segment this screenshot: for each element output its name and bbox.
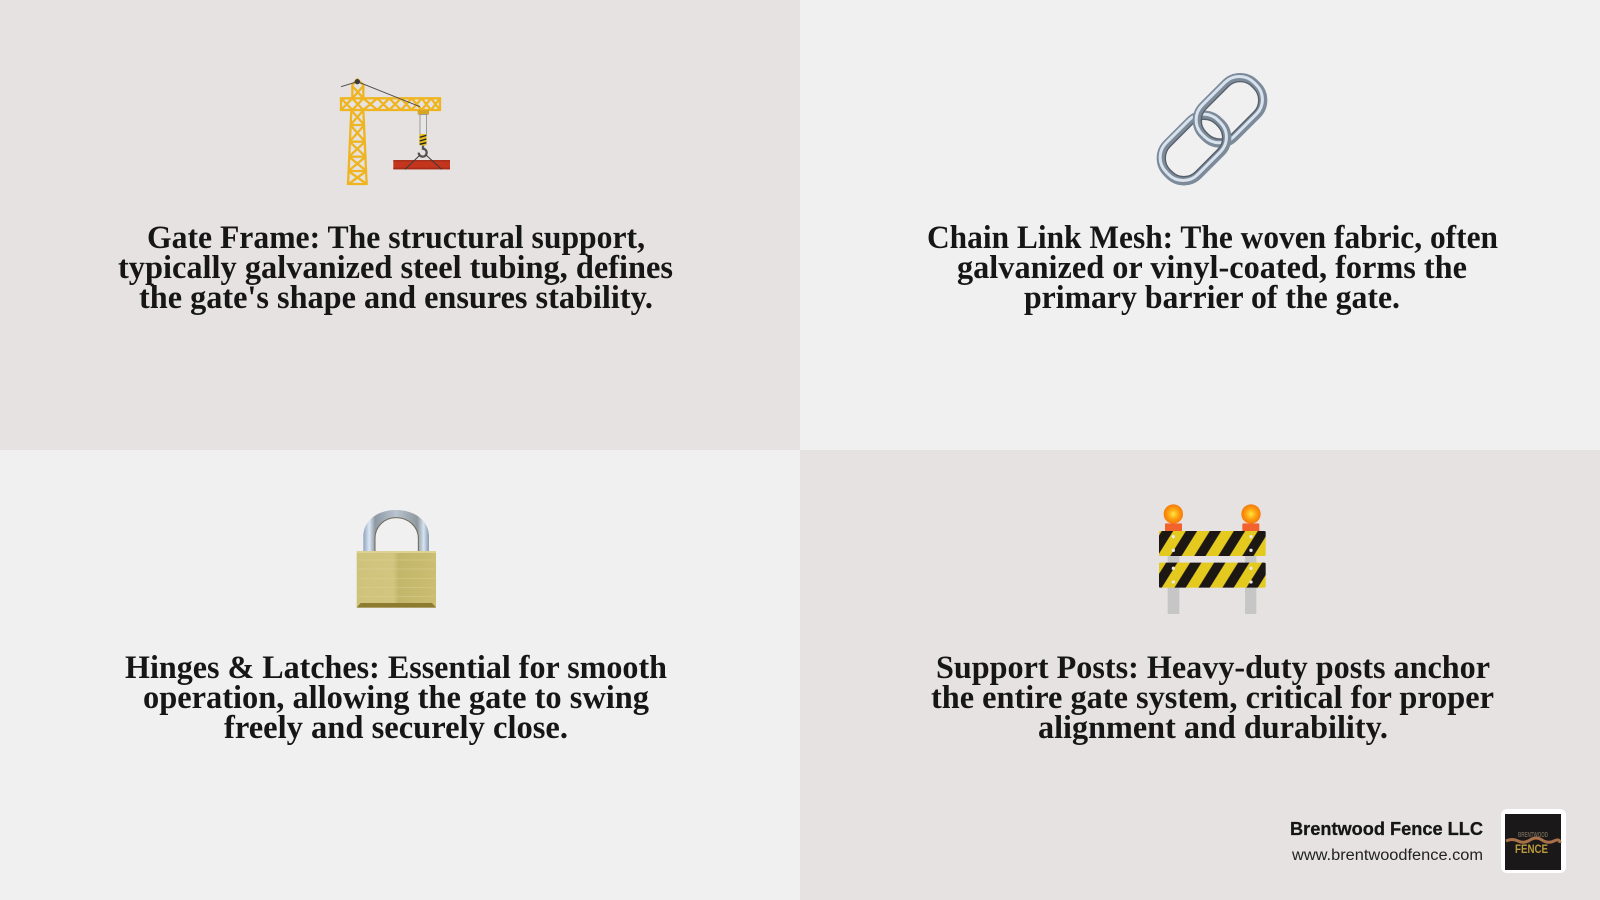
heading: hinges and latches: operation, allowing the gate to swing (143, 680, 649, 716)
logo badge: BRENTWOOD (1518, 832, 1548, 839)
heading: gate frame: Gate Frame: The structural support, (147, 220, 645, 256)
heading: gate frame: typically galvanized steel tubing, defines (118, 250, 673, 286)
heading: support posts: alignment and durability. (1038, 710, 1388, 746)
icon: road barrier (1159, 504, 1266, 614)
logo badge: FENCE (1515, 842, 1548, 856)
heading: chain link mesh: galvanized or vinyl-coated, forms the (957, 250, 1467, 286)
website url: www.brentwoodfence.com (1291, 847, 1483, 864)
heading: chain link mesh: Chain Link Mesh: The woven fabric, often (927, 220, 1498, 256)
heading: hinges and latches: Hinges & Latches: Essential for smooth (125, 650, 667, 686)
heading: hinges and latches: freely and securely close. (224, 710, 568, 746)
icon: padlock (357, 510, 436, 608)
heading: support posts: the entire gate system, critical for proper (931, 680, 1494, 716)
panel: hinges and latches (0, 450, 800, 900)
panel: gate frame (0, 0, 800, 450)
icon: construction crane (341, 79, 450, 185)
heading: chain link mesh (927, 220, 1498, 316)
panel: support posts (800, 450, 1600, 900)
heading: support posts (931, 650, 1494, 746)
panel: chain link mesh (928, 73, 1498, 315)
heading: chain link mesh: primary barrier of the gate. (1024, 280, 1400, 316)
heading: support posts: Support Posts: Heavy-duty posts anchor (936, 650, 1490, 686)
heading: hinges and latches (125, 650, 667, 746)
heading: gate frame: the gate's shape and ensures stability. (139, 280, 653, 316)
logo badge (1501, 809, 1566, 873)
company name: Brentwood Fence LLC (1290, 818, 1483, 839)
icon: chain links (1156, 73, 1268, 186)
heading: gate frame (118, 220, 673, 316)
